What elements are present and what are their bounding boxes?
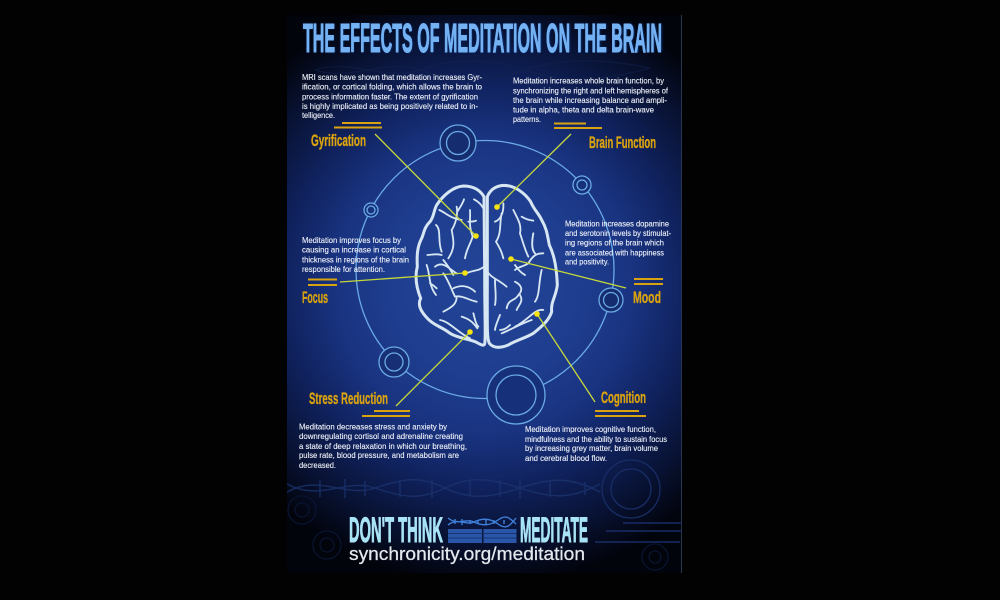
text: mood description	[565, 220, 671, 267]
ring: lower left	[379, 347, 409, 377]
text: cognition description: mindfulness and the ability to sustain focus	[525, 435, 667, 444]
ring: left	[364, 203, 378, 217]
left hemisphere folds	[427, 199, 484, 338]
icon: DNA and bars	[448, 517, 516, 543]
label: Brain Function: Brain Function	[589, 133, 656, 152]
text: mood description: Meditation increases dopamine	[565, 220, 669, 229]
text: gyrification description: MRI scans have shown that meditation increases Gyr-	[302, 73, 482, 82]
label: Brain Function	[554, 122, 656, 152]
text: brain function description: Meditation increases whole brain function, by	[513, 76, 665, 85]
text: brain function description: tude in alpha, theta and delta brain-wave	[513, 106, 654, 115]
text: cognition description	[525, 425, 667, 463]
text: brain function description: patterns.	[513, 115, 541, 124]
text: cognition description: and cerebral blood flow.	[525, 454, 607, 463]
text: MEDITATE	[520, 511, 588, 550]
title	[303, 15, 663, 61]
connector lines	[340, 134, 626, 406]
text: cognition description: by increasing grey matter, brain volume	[525, 444, 658, 453]
right hemisphere folds	[487, 203, 543, 333]
faint DNA band bottom	[287, 479, 600, 498]
text: stress reduction description: downregulating cortisol and adrenaline creating	[299, 432, 463, 441]
text: focus description: thickness in regions of the brain	[302, 255, 409, 264]
label: Focus	[302, 278, 337, 307]
text: stress reduction description: pulse rate, blood pressure, and metabolism are	[299, 451, 459, 460]
text: gyrification description	[302, 73, 482, 120]
faint rings and lines bottom	[288, 460, 682, 570]
text: focus description	[302, 236, 409, 274]
label: Stress Reduction	[309, 389, 410, 417]
ring: right	[599, 288, 623, 312]
text: stress reduction description: decreased.	[299, 461, 336, 470]
text: gyrification description: process information faster. The extent of gyrification	[302, 92, 478, 101]
text: mood description: and serotonin levels by stimulat-	[565, 229, 671, 238]
text: gyrification description: is highly implicated as being positively related to in-	[302, 102, 478, 111]
label: Cognition: Cognition	[601, 388, 646, 407]
text: stress reduction description: a state of deep relaxation in which our breathing,	[299, 442, 467, 451]
text: focus description: causing an increase in cortical	[302, 246, 406, 255]
text: brain function description: synchronizing the right and left hemispheres of	[513, 86, 669, 95]
text: mood description: are associated with happiness	[565, 248, 664, 257]
text: mood description: and positivity.	[565, 258, 609, 267]
text: brain function description: the brain while increasing balance and ampli-	[513, 96, 667, 105]
label: Cognition	[595, 388, 646, 417]
connector dots	[462, 204, 540, 335]
label: Mood: Mood	[633, 288, 661, 307]
ring: upper right	[573, 176, 591, 194]
text: stress reduction description	[299, 422, 467, 470]
url: synchronicity.org/meditation	[349, 543, 585, 564]
text: DON'T THINK	[349, 511, 443, 550]
poster panel	[287, 15, 682, 573]
left hemisphere outline	[416, 186, 485, 345]
orbit circle with rings	[356, 125, 623, 424]
label: Mood	[633, 278, 663, 307]
ring: bottom	[487, 366, 545, 424]
label: Gyrification: Gyrification	[311, 131, 366, 150]
text: mood description: ing regions of the brain which	[565, 239, 664, 248]
label: Stress Reduction: Stress Reduction	[309, 389, 388, 408]
text: gyrification description: telligence.	[302, 111, 335, 120]
right hemisphere outline	[487, 185, 557, 347]
text: focus description: responsible for attention.	[302, 265, 385, 274]
label: Focus: Focus	[302, 288, 328, 307]
text: stress reduction description: Meditation decreases stress and anxiety by	[299, 422, 448, 432]
text: gyrification description: ification, or cortical folding, which allows the brain to	[302, 83, 482, 92]
faint DNA watermark top	[315, 61, 650, 79]
label: Gyrification	[311, 122, 382, 150]
ring: top	[440, 125, 476, 161]
text: focus description: Meditation improves focus by	[302, 236, 402, 245]
text: cognition description: Meditation improves cognitive function,	[525, 425, 656, 434]
text: brain function description	[513, 76, 669, 124]
brain illustration	[416, 185, 557, 347]
